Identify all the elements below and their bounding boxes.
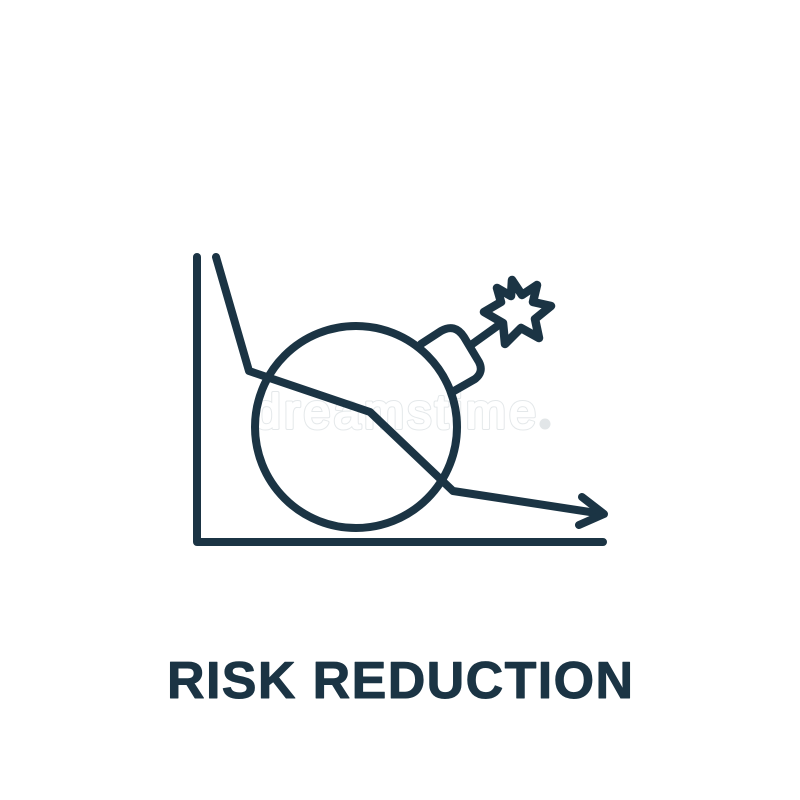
- chart axes: [197, 257, 603, 542]
- icon: risk reduction chart with bomb: [197, 257, 604, 542]
- icon: bomb cap: [421, 328, 481, 391]
- icon: bomb fuse: [471, 322, 503, 345]
- watermark: dreamstime: [254, 386, 536, 439]
- declining risk line: [216, 257, 603, 514]
- title: RISK REDUCTION: [167, 652, 633, 710]
- icon: bomb body: [255, 326, 457, 528]
- arrow head: [579, 497, 604, 525]
- watermark: dreamstime: [254, 386, 536, 439]
- icon: spark: [484, 280, 551, 344]
